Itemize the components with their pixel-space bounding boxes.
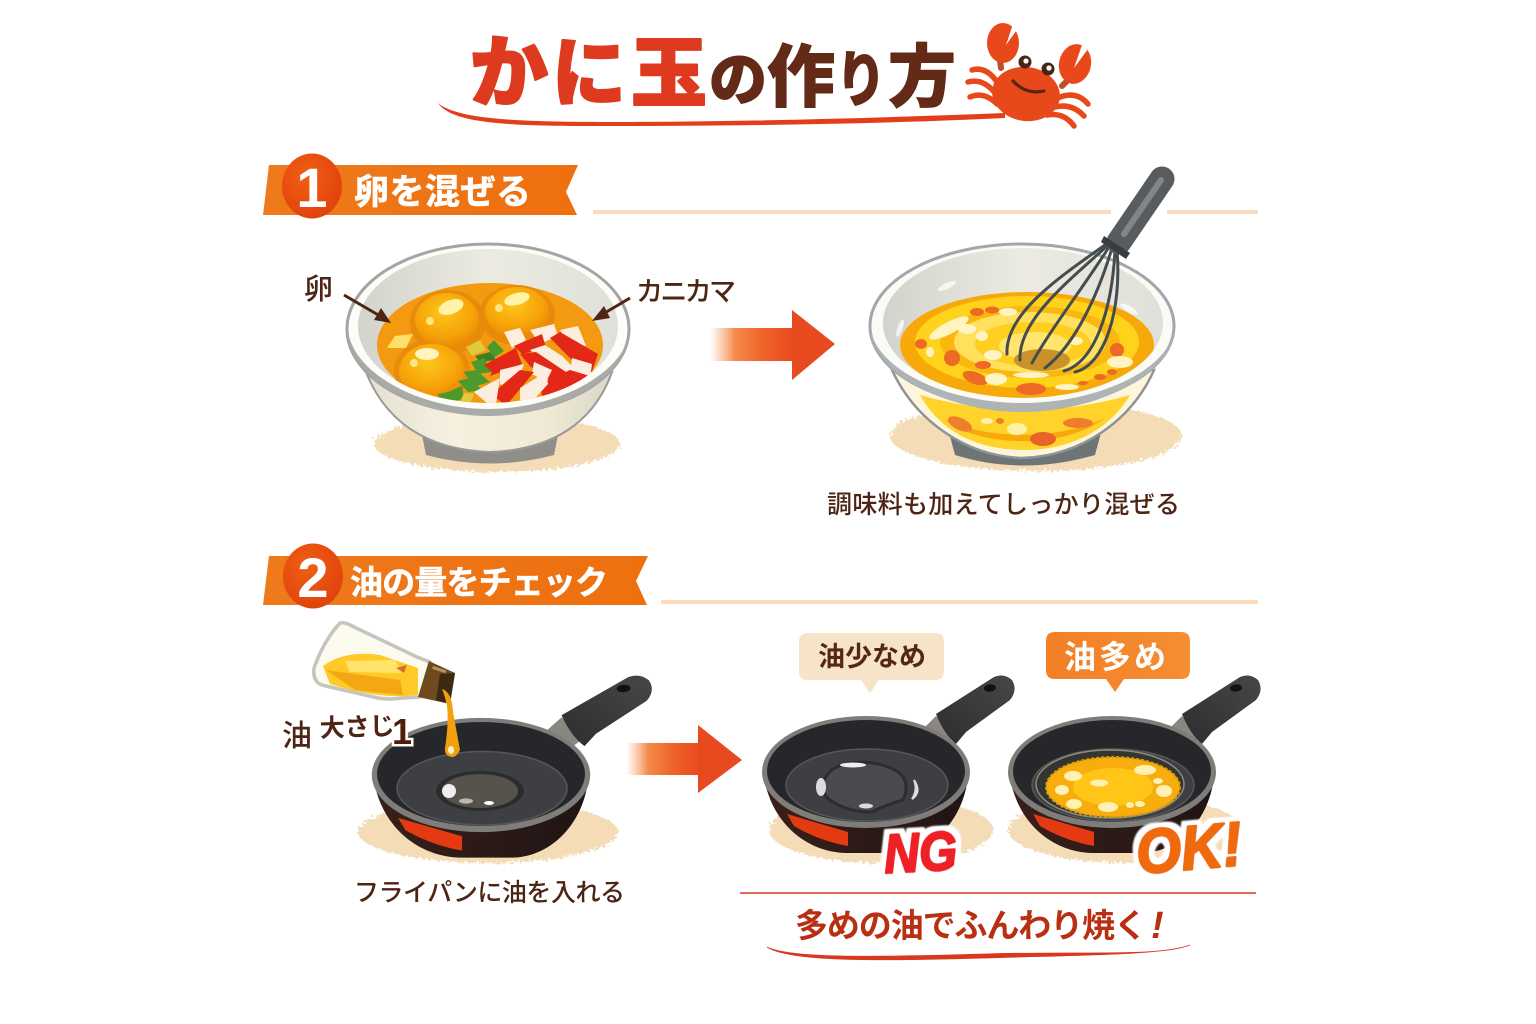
speech bubble: plenty of oil [1046, 632, 1190, 692]
label: one tablespoon: 1 [392, 711, 412, 752]
pan: plenty of oil with omelet [1008, 676, 1261, 863]
oil puddle [436, 771, 524, 811]
bowl with eggs and crab sticks [347, 244, 630, 472]
omelet [1046, 757, 1180, 817]
step number 1 [282, 154, 342, 219]
section 2 heading banner [263, 544, 648, 609]
main frying pan with oil [358, 676, 652, 863]
conclusion callout [740, 893, 1256, 960]
title text: brown part: り [836, 47, 886, 114]
oil stream [442, 689, 460, 757]
title text: red part [470, 29, 707, 117]
arrow to egg [344, 295, 391, 323]
speech bubble: little oil [799, 633, 944, 693]
egg seen through the glass [920, 395, 1130, 450]
pan: too little oil [762, 676, 1015, 863]
title text: red part: 玉 [631, 32, 707, 117]
badge: NG: NG [882, 819, 959, 885]
crab stick pieces [474, 324, 598, 406]
speech bubble: plenty of oil: 油多め [1064, 632, 1166, 678]
caption: add seasoning and mix: 調味料も加えてしっかり混ぜる [827, 485, 1180, 521]
step number 2: 2 [297, 546, 329, 609]
step number 1: 1 [296, 156, 328, 219]
title text: brown part: 作 [767, 40, 835, 116]
caption: pour oil into pan: フライパンに油を入れる [354, 873, 625, 909]
title text: brown part [709, 40, 956, 116]
label: egg: 卵 [304, 266, 333, 308]
mixed egg liquid [900, 292, 1154, 398]
arrow: step 2 to comparison [626, 725, 742, 793]
label: crab stick [592, 270, 736, 321]
label: oil: 油 [282, 711, 312, 755]
label: one tablespoon [319, 706, 412, 752]
heading text: 油の量をチェック [350, 556, 608, 604]
arrow to crab stick [592, 298, 630, 321]
title text: red part: か [470, 29, 548, 117]
conclusion text: 多めの油でふんわり焼く [795, 899, 1147, 947]
oil bottle pouring [314, 623, 460, 757]
speech bubble: little oil: 油少なめ [818, 635, 926, 674]
label: crab stick: カニカマ [636, 270, 736, 309]
heading text: 卵を混ぜる [354, 164, 531, 215]
conclusion text: ! [1151, 905, 1164, 947]
title text: brown part: の [709, 48, 767, 113]
step number 2 [283, 544, 343, 609]
badge: OK: OK! [1133, 810, 1245, 888]
whisk [1007, 179, 1162, 372]
beaten egg liquid [377, 283, 603, 407]
glass bowl with mixed egg and whisk [870, 179, 1182, 471]
arrow: step 1 to mixed [710, 310, 835, 380]
label: one tablespoon: 大さじ [319, 706, 395, 745]
section 1 heading banner [263, 154, 578, 219]
title [438, 23, 1095, 126]
title text: brown part: 方 [888, 40, 956, 116]
title underline swoosh [438, 103, 1005, 126]
label: egg [304, 266, 391, 323]
conclusion underline swoosh [767, 945, 1190, 960]
title text: red part: に [552, 32, 626, 117]
icon: crab [968, 23, 1095, 126]
comparison: plenty of oil [1008, 632, 1261, 888]
green onions [438, 340, 504, 404]
infographic: how to make kani-tama [263, 23, 1261, 960]
egg yolks [387, 287, 549, 398]
comparison: too little oil [762, 633, 1015, 885]
